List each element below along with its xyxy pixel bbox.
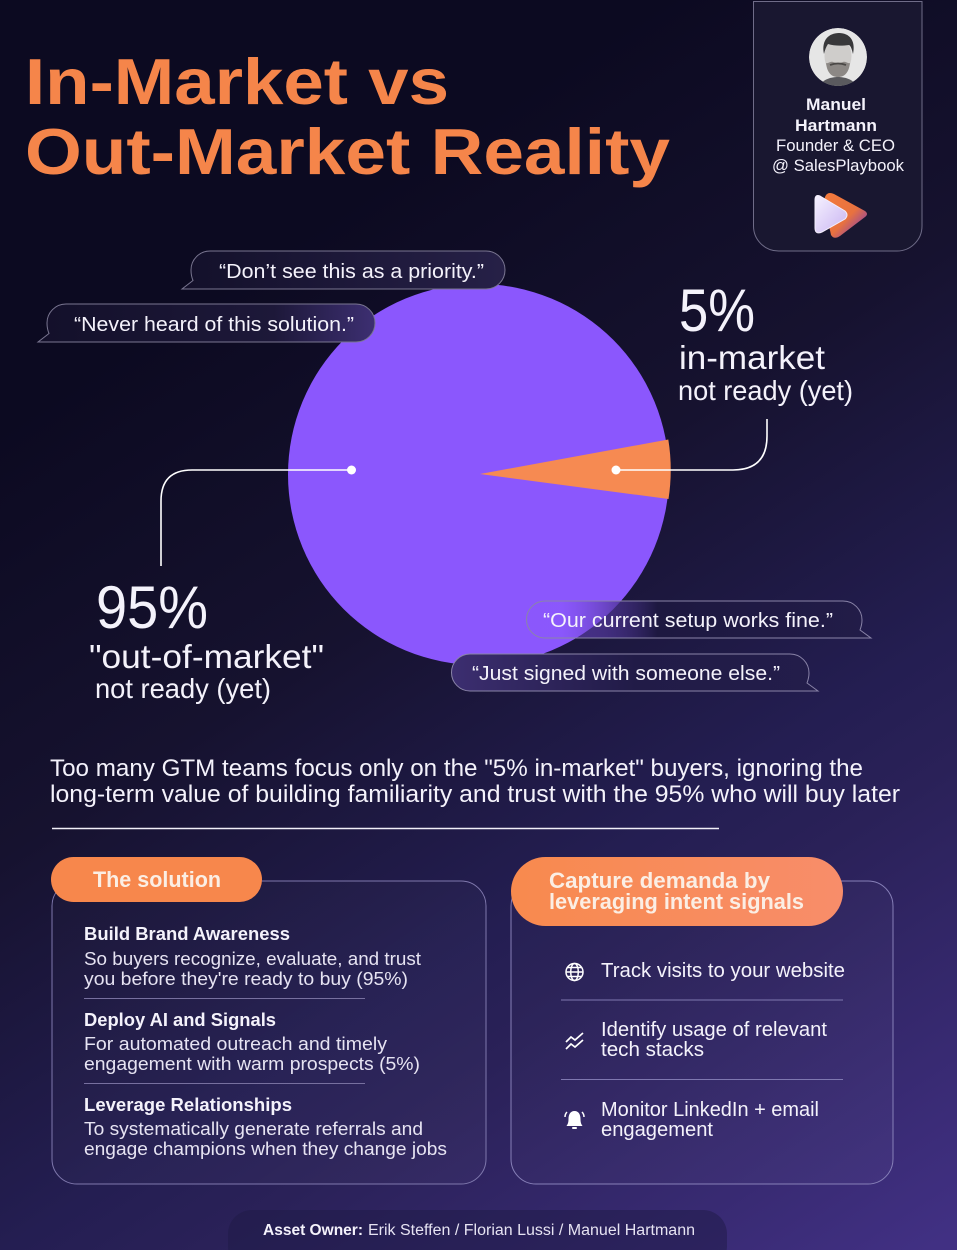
- stat: 95 percent out-of-market: 95%: [96, 574, 208, 641]
- text: track visits: Track visits to your website: [601, 960, 845, 982]
- item: brand awareness: [84, 923, 421, 989]
- title: In-Market vs: [25, 45, 449, 118]
- quote bubble: priority: [182, 251, 505, 289]
- connector: 5 percent: [612, 419, 767, 474]
- item: brand awareness: Build Brand Awareness: [84, 923, 290, 944]
- author role: @ SalesPlaybook: [772, 156, 904, 175]
- quote bubble: never heard: [38, 304, 375, 342]
- item: AI and signals: engagement with warm prospects (5%): [84, 1053, 420, 1074]
- quote bubble: priority: “Don’t see this as a priority.”: [219, 261, 484, 283]
- text: tech stacks: Identify usage of relevant: [601, 1019, 827, 1041]
- summary text: long-term value of building familiarity and trust with the 95% who will buy later: [50, 781, 900, 808]
- footer: asset owner: [228, 1210, 727, 1250]
- title: Out-Market Reality: [25, 115, 670, 188]
- item: relationships: To systematically generate referrals and: [84, 1118, 423, 1139]
- icon: alarm bell: [565, 1111, 584, 1129]
- item: brand awareness: you before they're ready to buy (95%): [84, 968, 408, 989]
- stat: 5 percent in-market: 5%: [679, 277, 755, 344]
- pill heading: the solution: [51, 857, 262, 902]
- item: relationships: [84, 1094, 447, 1159]
- item: AI and signals: [84, 1009, 420, 1074]
- text: tech stacks: [601, 1019, 827, 1061]
- item: AI and signals: Deploy AI and Signals: [84, 1009, 276, 1030]
- pill heading: capture demand: [511, 857, 843, 926]
- stat: 95 percent out-of-market: [89, 574, 324, 704]
- summary text: Too many GTM teams focus only on the "5% in-market" buyers, ignoring the: [50, 755, 863, 782]
- pie chart: 95 / 5: [288, 284, 671, 665]
- item: brand awareness: So buyers recognize, evaluate, and trust: [84, 948, 421, 969]
- quote bubble: current setup: [526, 601, 871, 638]
- author role: Founder & CEO: [776, 136, 895, 155]
- stat: 5 percent in-market: not ready (yet): [678, 375, 853, 406]
- panel: capture demand: [511, 857, 893, 1184]
- quote bubble: current setup: “Our current setup works fine.”: [543, 610, 833, 632]
- icon: author portrait: [809, 28, 867, 90]
- author card: [754, 2, 922, 251]
- footer: asset owner: Erik Steffen / Florian Lussi / Manuel Hartmann: [368, 1222, 695, 1239]
- title: [25, 45, 670, 188]
- icon: trend lines: [566, 1033, 583, 1049]
- quote bubble: signed elsewhere: “Just signed with someone else.”: [472, 663, 780, 685]
- stat: 5 percent in-market: in-market: [679, 339, 825, 376]
- pill heading: capture demand: Capture demanda by: [549, 868, 771, 893]
- quote bubble: signed elsewhere: [452, 654, 818, 691]
- footer: asset owner: Asset Owner:: [263, 1222, 363, 1239]
- quote bubble: never heard: “Never heard of this solution.”: [74, 314, 354, 336]
- author card: Hartmann: [795, 116, 877, 135]
- icon: globe: [566, 964, 583, 980]
- item: AI and signals: For automated outreach and timely: [84, 1033, 388, 1054]
- text: tech stacks: tech stacks: [601, 1039, 704, 1061]
- item: relationships: engage champions when they change jobs: [84, 1138, 447, 1159]
- text: linkedin monitoring: engagement: [601, 1119, 713, 1141]
- icon: play logo: [815, 193, 867, 238]
- item: relationships: Leverage Relationships: [84, 1094, 292, 1115]
- text: linkedin monitoring: Monitor LinkedIn + email: [601, 1099, 819, 1121]
- stat: 95 percent out-of-market: "out-of-market": [89, 638, 324, 675]
- summary text: [50, 755, 900, 808]
- author name: Manuel: [806, 95, 866, 114]
- stat: 5 percent in-market: [678, 277, 853, 406]
- text: linkedin monitoring: [601, 1099, 819, 1141]
- pill heading: the solution: The solution: [93, 867, 221, 892]
- pill heading: capture demand: leveraging intent signals: [549, 889, 804, 914]
- stat: 95 percent out-of-market: not ready (yet): [95, 673, 271, 704]
- author role: [772, 136, 904, 175]
- panel: the solution: [51, 857, 486, 1184]
- connector: 95 percent: [161, 466, 356, 566]
